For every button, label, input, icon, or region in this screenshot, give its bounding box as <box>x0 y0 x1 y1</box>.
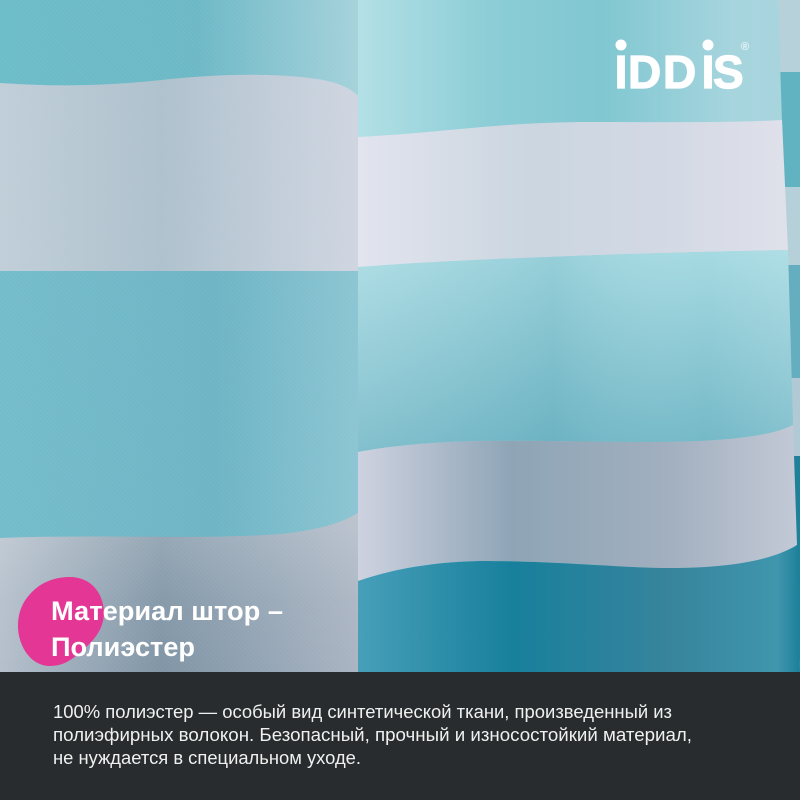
panel: dark description footer <box>0 672 800 800</box>
text block: description: 100% полиэстер — особый вид синтетической ткани, произведенный из <box>53 702 672 722</box>
heading: Материал штор – <box>51 596 283 626</box>
text block: description <box>53 702 692 768</box>
text block: description: полиэфирных волокон. Безопасный, прочный и износостойкий материал, <box>53 725 692 745</box>
logo: IDDIS: IDDIS <box>615 46 744 98</box>
text block: description: не нуждается в специальном уходе. <box>53 748 361 768</box>
heading <box>51 596 283 662</box>
far right curtain fold with stripes <box>770 0 800 672</box>
left curtain fold with stripes <box>0 0 359 672</box>
heading: Полиэстер <box>51 632 195 662</box>
icon: pink blob <box>18 577 104 666</box>
centre curtain fold with stripes <box>358 0 800 672</box>
logo: IDDIS: ® <box>741 41 749 53</box>
